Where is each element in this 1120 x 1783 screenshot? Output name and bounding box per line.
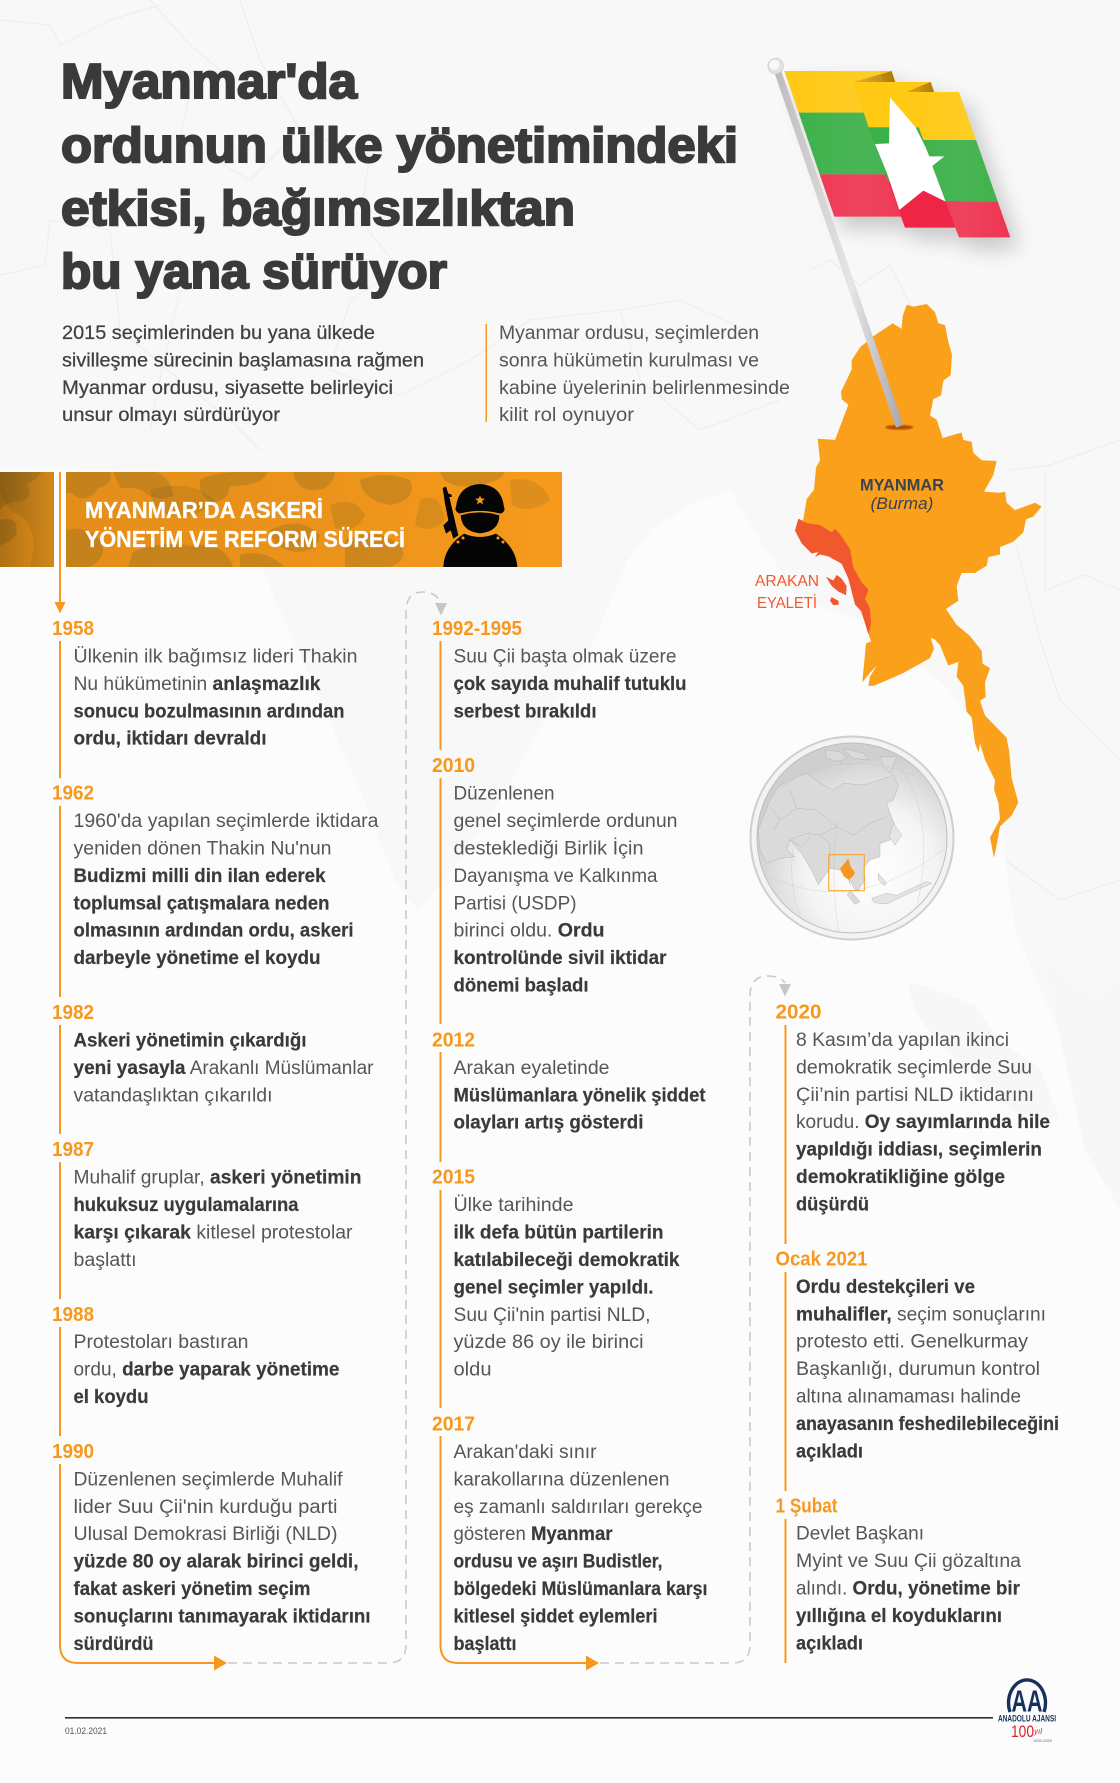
intro text: left: Myanmar ordusu, siyasette belirleyici xyxy=(62,378,393,399)
entry: 2020: korudu. Oy sayımlarında hile xyxy=(796,1112,1050,1133)
timeline connector: column 1 line xyxy=(60,641,227,1670)
entry: 1958: sonucu bozulmasının ardından xyxy=(74,701,344,722)
map labels: ARAKAN xyxy=(755,573,819,590)
entry: 1982: Askeri yönetimin çıkardığı xyxy=(74,1030,306,1052)
entry: 1 Şubat: Myint ve Suu Çii gözaltına xyxy=(796,1551,1021,1572)
entry: 1962: darbeyle yönetime el koydu xyxy=(74,948,320,969)
entry: 2020: 8 Kasım’da yapılan ikinci xyxy=(796,1030,1009,1051)
title: bu yana sürüyor xyxy=(61,245,447,299)
entry: 1992-1995: 1992-1995 xyxy=(432,618,522,640)
entry: 1988: el koydu xyxy=(74,1387,148,1408)
entry: 2010: genel seçimlerde ordunun xyxy=(454,811,678,832)
entry: 1987: başlattı xyxy=(74,1250,136,1271)
entry: 1990: lider Suu Çii'nin kurduğu parti xyxy=(74,1497,338,1518)
entry: 1 Şubat: 1 Şubat xyxy=(776,1495,838,1517)
entry: Ocak 2021: Başkanlığı, durumun kontrol xyxy=(796,1359,1040,1380)
entry: 2015: Suu Çii'nin partisi NLD, xyxy=(454,1305,650,1326)
entry: 1990 xyxy=(52,1441,370,1655)
icon: soldier xyxy=(443,484,517,567)
entry: 2010: dönemi başladı xyxy=(454,976,588,997)
entry: Ocak 2021 xyxy=(776,1248,1059,1462)
entry: 1988 xyxy=(52,1304,340,1408)
section banner xyxy=(0,472,562,567)
entry: 2010: desteklediği Birlik İçin xyxy=(454,838,644,859)
entry: 1992-1995: çok sayıda muhalif tutuklu xyxy=(454,674,686,695)
title: etkisi, bağımsızlıktan xyxy=(61,182,575,236)
intro text: right with orange rule: kabine üyelerinin belirlenmesinde xyxy=(499,378,790,399)
banner heading: MYANMAR’DA ASKERİ xyxy=(85,497,323,523)
entry: 2015: oldu xyxy=(454,1360,492,1381)
entry: 1958: Ülkenin ilk bağımsız lideri Thakin xyxy=(74,646,358,667)
entry: Ocak 2021: Ocak 2021 xyxy=(776,1248,868,1270)
entry: 2015: Ülke tarihinde xyxy=(454,1195,574,1216)
timeline connector: dashed link to column 3 xyxy=(600,976,791,1663)
entry: 1987: karşı çıkarak kitlesel protestolar xyxy=(74,1222,353,1244)
entry: 2017: gösteren Myanmar xyxy=(454,1524,613,1545)
map labels xyxy=(755,476,944,612)
entry: 1987: hukuksuz uygulamalarına xyxy=(74,1195,299,1216)
timeline connector: column 3 line xyxy=(784,1025,786,1663)
entry: 1988: 1988 xyxy=(52,1304,94,1326)
entry: 1992-1995 xyxy=(432,618,686,722)
entry: 1962: 1962 xyxy=(52,783,94,805)
timeline connector: column 2 line xyxy=(440,641,599,1670)
entry: 1 Şubat: açıkladı xyxy=(796,1633,863,1654)
entry: 2015: genel seçimler yapıldı. xyxy=(454,1277,654,1298)
entry: 2015 xyxy=(432,1167,680,1381)
entry: 1990: fakat askeri yönetim seçim xyxy=(74,1579,310,1600)
locator globe xyxy=(750,736,954,940)
entry: 2020: demokratikliğine gölge xyxy=(796,1167,1005,1188)
entry: 2020: 2020 xyxy=(776,1002,822,1024)
entry: 2017: ordusu ve aşırı Budistler, xyxy=(454,1552,662,1573)
entry: 2015: ilk defa bütün partilerin xyxy=(454,1222,664,1244)
map labels: MYANMAR xyxy=(860,476,944,494)
banner heading: YÖNETİM VE REFORM SÜRECİ xyxy=(85,526,405,552)
entry: 2020: Çii’nin partisi NLD iktidarını xyxy=(796,1085,1034,1106)
logo: Anadolu Ajansı: 1920-2020 xyxy=(1033,1738,1053,1743)
entry: 1988: Protestoları bastıran xyxy=(74,1332,248,1353)
entry: Ocak 2021: protesto etti. Genelkurmay xyxy=(796,1332,1029,1353)
entry: 1990: 1990 xyxy=(52,1441,94,1463)
entry: 2012: Müslümanlara yönelik şiddet xyxy=(454,1085,706,1106)
footer rule and date: 01.02.2021 xyxy=(65,1726,107,1736)
intro text: right with orange rule: sonra hükümetin kurulması ve xyxy=(499,350,759,372)
entry: Ocak 2021: açıkladı xyxy=(796,1441,863,1462)
intro text: right with orange rule: Myanmar ordusu, seçimlerden xyxy=(499,323,759,344)
logo: Anadolu Ajansı xyxy=(998,1680,1056,1743)
entry: 2012: Arakan eyaletinde xyxy=(454,1058,610,1079)
entry: 2017: Arakan'daki sınır xyxy=(454,1442,597,1463)
entry: 1982: yeni yasayla Arakanlı Müslümanlar xyxy=(74,1058,374,1079)
entry: 2010: kontrolünde sivil iktidar xyxy=(454,948,667,969)
entry: 1 Şubat: Devlet Başkanı xyxy=(796,1524,924,1545)
entry: 2017: bölgedeki Müslümanlara karşı xyxy=(454,1579,708,1600)
entry: 2020: yapıldığı iddiası, seçimlerin xyxy=(796,1140,1042,1161)
logo: Anadolu Ajansı: ANADOLU AJANSI xyxy=(998,1714,1056,1724)
intro text: right with orange rule: kilit rol oynuyor xyxy=(499,405,635,426)
title xyxy=(61,55,738,299)
entry: 1962: 1960'da yapılan seçimlerde iktidara xyxy=(74,811,379,832)
entry: 2017: kitlesel şiddet eylemleri xyxy=(454,1606,658,1628)
entry: 1990: sonuçlarını tanımayarak iktidarını xyxy=(74,1606,370,1628)
entry: 1987: Muhalif gruplar, askeri yönetimin xyxy=(74,1168,362,1189)
entry: 2015: yüzde 86 oy ile birinci xyxy=(454,1332,644,1353)
entry: 2017: başlattı xyxy=(454,1634,516,1655)
title: Myanmar'da xyxy=(61,55,358,109)
entry: 2020: demokratik seçimlerde Suu xyxy=(796,1057,1032,1078)
arrow: timeline start xyxy=(54,472,66,614)
entry: 1987: 1987 xyxy=(52,1139,94,1161)
entry: 1987 xyxy=(52,1139,362,1271)
entry: 2012 xyxy=(432,1030,706,1134)
logo: Anadolu Ajansı: yıl xyxy=(1033,1727,1042,1736)
entry: 2015: 2015 xyxy=(432,1167,475,1189)
entry: Ocak 2021: muhalifler, seçim sonuçlarını xyxy=(796,1304,1046,1325)
entry: 2020: düşürdü xyxy=(796,1194,869,1216)
entry: 2017 xyxy=(432,1414,708,1655)
entry: 1962: toplumsal çatışmalara neden xyxy=(74,893,330,914)
entry: 1988: ordu, darbe yaparak yönetime xyxy=(74,1360,340,1381)
entry: 1962 xyxy=(52,783,379,969)
entry: 2010: Düzenlenen xyxy=(454,784,554,805)
entry: 1990: sürdürdü xyxy=(74,1634,154,1655)
entry: Ocak 2021: anayasanın feshedilebileceğini xyxy=(796,1414,1059,1435)
entry: 1962: Budizmi milli din ilan ederek xyxy=(74,866,326,887)
entry: 1958: Nu hükümetinin anlaşmazlık xyxy=(74,674,321,695)
entry: 2010: 2010 xyxy=(432,755,475,777)
map: Myanmar xyxy=(795,304,1042,858)
entry: Ocak 2021: Ordu destekçileri ve xyxy=(796,1277,975,1298)
entry: Ocak 2021: altına alınamaması halinde xyxy=(796,1386,1021,1408)
entry: 1962: olmasının ardından ordu, askeri xyxy=(74,921,354,942)
entry: 2017: eş zamanlı saldırıları gerekçe xyxy=(454,1497,702,1518)
entry: 2017: karakollarına düzenlenen xyxy=(454,1469,670,1490)
entry: 1992-1995: Suu Çii başta olmak üzere xyxy=(454,646,676,667)
title: ordunun ülke yönetimindeki xyxy=(61,119,738,173)
entry: 2010: birinci oldu. Ordu xyxy=(454,921,604,942)
entry: 2010: Partisi (USDP) xyxy=(454,893,576,914)
entry: 1 Şubat xyxy=(776,1495,1021,1654)
entry: 1990: Ulusal Demokrasi Birliği (NLD) xyxy=(74,1524,338,1545)
intro text: left: unsur olmayı sürdürüyor xyxy=(62,405,281,426)
banner heading xyxy=(85,497,405,552)
entry: 1958 xyxy=(52,618,358,750)
entry: 1982 xyxy=(52,1002,374,1106)
entry: 1982: 1982 xyxy=(52,1002,94,1024)
entry: 1990: yüzde 80 oy alarak birinci geldi, xyxy=(74,1552,358,1573)
entry: 2020 xyxy=(776,1002,1050,1216)
map labels: EYALETİ xyxy=(757,593,817,612)
timeline connector: dashed link to column 2 xyxy=(228,592,447,1663)
intro text: left: sivilleşme sürecinin başlamasına rağmen xyxy=(62,350,424,372)
intro text: left xyxy=(62,323,424,426)
logo: Anadolu Ajansı: 100 xyxy=(1011,1722,1034,1741)
entry: 1958: ordu, iktidarı devraldı xyxy=(74,729,266,750)
entry: 1992-1995: serbest bırakıldı xyxy=(454,701,596,722)
entry: 1 Şubat: alındı. Ordu, yönetime bir xyxy=(796,1579,1021,1600)
entry: 1958: 1958 xyxy=(52,618,94,640)
entry: 2012: 2012 xyxy=(432,1030,475,1052)
entry: 1 Şubat: yıllığına el koyduklarını xyxy=(796,1606,1002,1627)
entry: 2010: Dayanışma ve Kalkınma xyxy=(454,866,658,887)
map labels: (Burma) xyxy=(870,494,934,513)
intro text: right with orange rule xyxy=(486,323,790,426)
entry: 2017: 2017 xyxy=(432,1414,475,1436)
logo: Anadolu Ajansı: AA xyxy=(1012,1684,1042,1718)
flag of Myanmar on pole xyxy=(768,58,1019,430)
entry: 2015: katılabileceği demokratik xyxy=(454,1250,680,1271)
entry: 1962: yeniden dönen Thakin Nu'nun xyxy=(74,838,332,859)
entry: 2012: olayları artış gösterdi xyxy=(454,1113,644,1134)
entry: 1990: Düzenlenen seçimlerde Muhalif xyxy=(74,1469,343,1490)
entry: 2010 xyxy=(432,755,678,997)
entry: 1982: vatandaşlıktan çıkarıldı xyxy=(74,1085,272,1106)
intro text: left: 2015 seçimlerinden bu yana ülkede xyxy=(62,323,375,344)
